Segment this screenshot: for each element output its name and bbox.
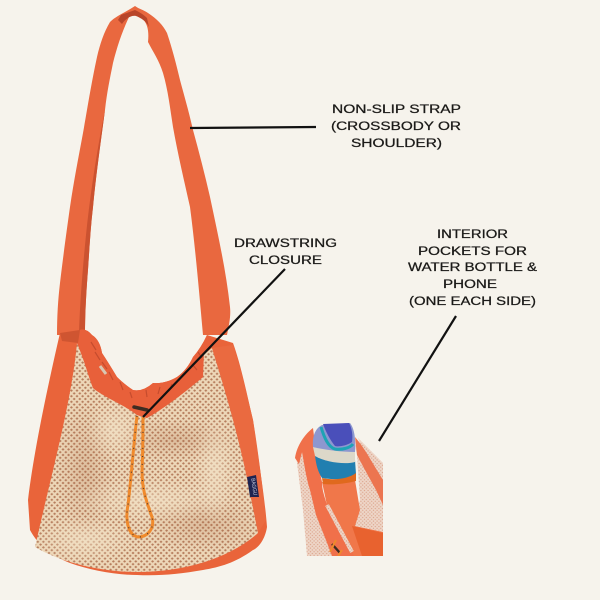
inset left mesh xyxy=(296,450,332,556)
label: interior pockets: INTERIOR xyxy=(437,229,508,241)
inset right ruffle xyxy=(355,437,383,505)
label: non-slip strap xyxy=(331,104,461,150)
inset back mesh xyxy=(352,445,383,532)
label: drawstring closure: CLOSURE xyxy=(249,255,322,267)
side seam shading xyxy=(212,345,266,533)
leader line: drawstring xyxy=(143,269,285,417)
inset water bottle xyxy=(313,423,356,484)
leader line: strap xyxy=(190,127,316,128)
label: non-slip strap: NON-SLIP STRAP xyxy=(332,104,461,116)
label: drawstring closure: DRAWSTRING xyxy=(234,238,337,250)
bag illustration xyxy=(28,6,267,575)
inset left orange band xyxy=(295,428,354,556)
brand label xyxy=(247,475,259,497)
inset outer mesh xyxy=(358,438,383,475)
label: interior pockets: POCKETS FOR xyxy=(418,246,527,258)
inset mesh strip xyxy=(327,505,352,552)
leader line: pockets xyxy=(379,316,456,441)
label: non-slip strap: SHOULDER) xyxy=(351,138,442,150)
label: interior pockets: WATER BOTTLE & xyxy=(408,262,537,274)
drawstring ruffle xyxy=(60,330,214,418)
label: interior pockets xyxy=(408,229,537,308)
label: interior pockets: PHONE xyxy=(443,279,497,291)
cord toggle xyxy=(134,407,147,410)
brand label: BAGGU xyxy=(249,478,258,496)
bag body xyxy=(28,330,267,575)
mesh panel xyxy=(35,343,265,572)
inset pocket interior xyxy=(322,480,383,556)
label: non-slip strap: (CROSSBODY OR xyxy=(331,121,461,133)
label: interior pockets: (ONE EACH SIDE) xyxy=(409,296,536,308)
inset cord toggle xyxy=(330,540,342,556)
strap xyxy=(57,6,230,335)
label: drawstring closure xyxy=(234,238,337,267)
inset: interior pocket with water bottle xyxy=(295,423,383,556)
orange cord loop xyxy=(127,416,153,537)
